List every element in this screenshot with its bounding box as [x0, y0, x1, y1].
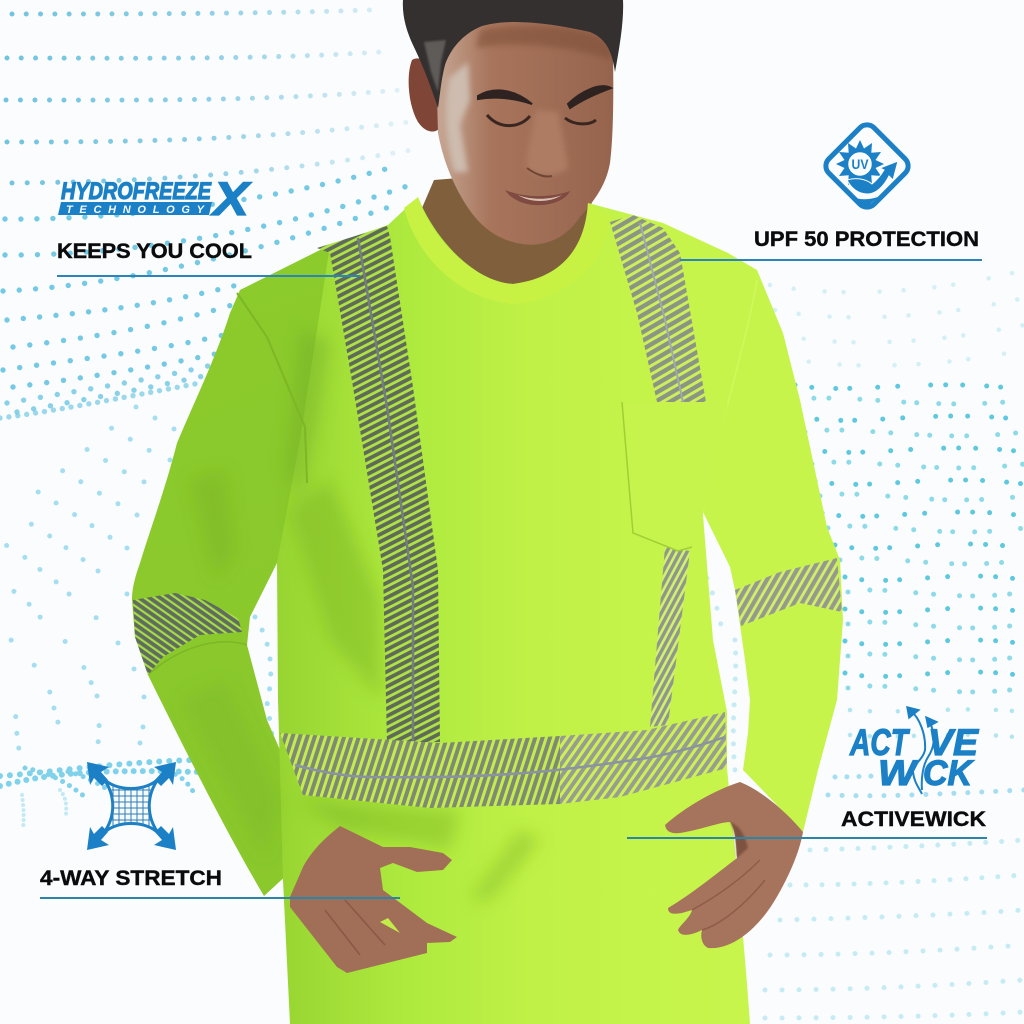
- leader line: [627, 837, 987, 839]
- forehead shade: [476, 26, 612, 60]
- face: [436, 5, 613, 245]
- right arm band: [735, 558, 842, 626]
- dots: mid left wave: [0, 165, 410, 418]
- shirt body: [277, 197, 750, 1024]
- dots: right scatter: [707, 270, 1024, 1018]
- brows: [478, 90, 532, 104]
- collar: [404, 197, 610, 304]
- dots: lower left falling rows: [6, 407, 272, 753]
- eyes: [487, 115, 530, 126]
- callout: activewick: [627, 707, 987, 839]
- lower right strap: [650, 547, 690, 727]
- waist band left: [280, 733, 560, 808]
- logo: active wick: [849, 707, 979, 794]
- icon: four-way arrows: [87, 762, 176, 850]
- nose: [527, 110, 568, 176]
- logo: hydrofreeze x: TECHNOLOGY: [66, 204, 206, 216]
- left cuff line: [148, 642, 247, 675]
- right hand: [665, 782, 803, 948]
- waist band right: [560, 712, 727, 804]
- dots: upper left wave: [6, 10, 412, 183]
- logo: hydrofreeze x: HYDROFREEZE: [61, 178, 212, 205]
- leader line: [40, 897, 400, 899]
- shirt left sleeve: [132, 245, 340, 896]
- shirt shading: [180, 330, 540, 900]
- shirt right sleeve: [663, 223, 843, 832]
- right sleeve seam: [703, 280, 757, 512]
- shirt: [132, 197, 843, 1024]
- leader line: [57, 275, 360, 277]
- label: activewick: ACTIVEWICK: [841, 808, 986, 831]
- logo: active wick: ACT: [849, 722, 911, 763]
- logo: active wick: CK: [923, 754, 975, 793]
- label: upf 50 protection: UPF 50 PROTECTION: [754, 227, 979, 251]
- logo: active wick: W: [878, 754, 919, 793]
- neck: [422, 170, 592, 286]
- callout: 4-way stretch: [40, 762, 400, 899]
- hair: [403, 0, 623, 108]
- label: 4-way stretch: 4-WAY STRETCH: [40, 867, 222, 890]
- left hand: [290, 826, 457, 973]
- shoulder seam: [237, 293, 307, 483]
- pocket: [622, 402, 728, 551]
- left arm band: [133, 593, 242, 675]
- logo: hydrofreeze x: X: [210, 172, 252, 225]
- mouth: [505, 190, 570, 205]
- right strap: [610, 215, 706, 402]
- leader line: [680, 259, 982, 261]
- callout: upf 50: [680, 121, 982, 261]
- left strap: [317, 226, 440, 743]
- label: keeps you cool: KEEPS YOU COOL: [57, 240, 252, 263]
- logo: active wick: VE: [928, 722, 979, 763]
- pocket stitch: [622, 402, 692, 551]
- man: head and neck: [403, 0, 623, 286]
- logo: hydrofreeze x: [58, 172, 252, 225]
- hair grey patch: [424, 40, 446, 92]
- dots: lower left splash: [0, 759, 270, 828]
- icon: uv diamond: UV: [852, 157, 868, 172]
- ear: [409, 58, 440, 132]
- callout: hydrofreeze x: [57, 172, 360, 277]
- icon: uv diamond: [822, 121, 912, 211]
- face highlight: [446, 62, 470, 172]
- reflective stripes: [133, 215, 842, 808]
